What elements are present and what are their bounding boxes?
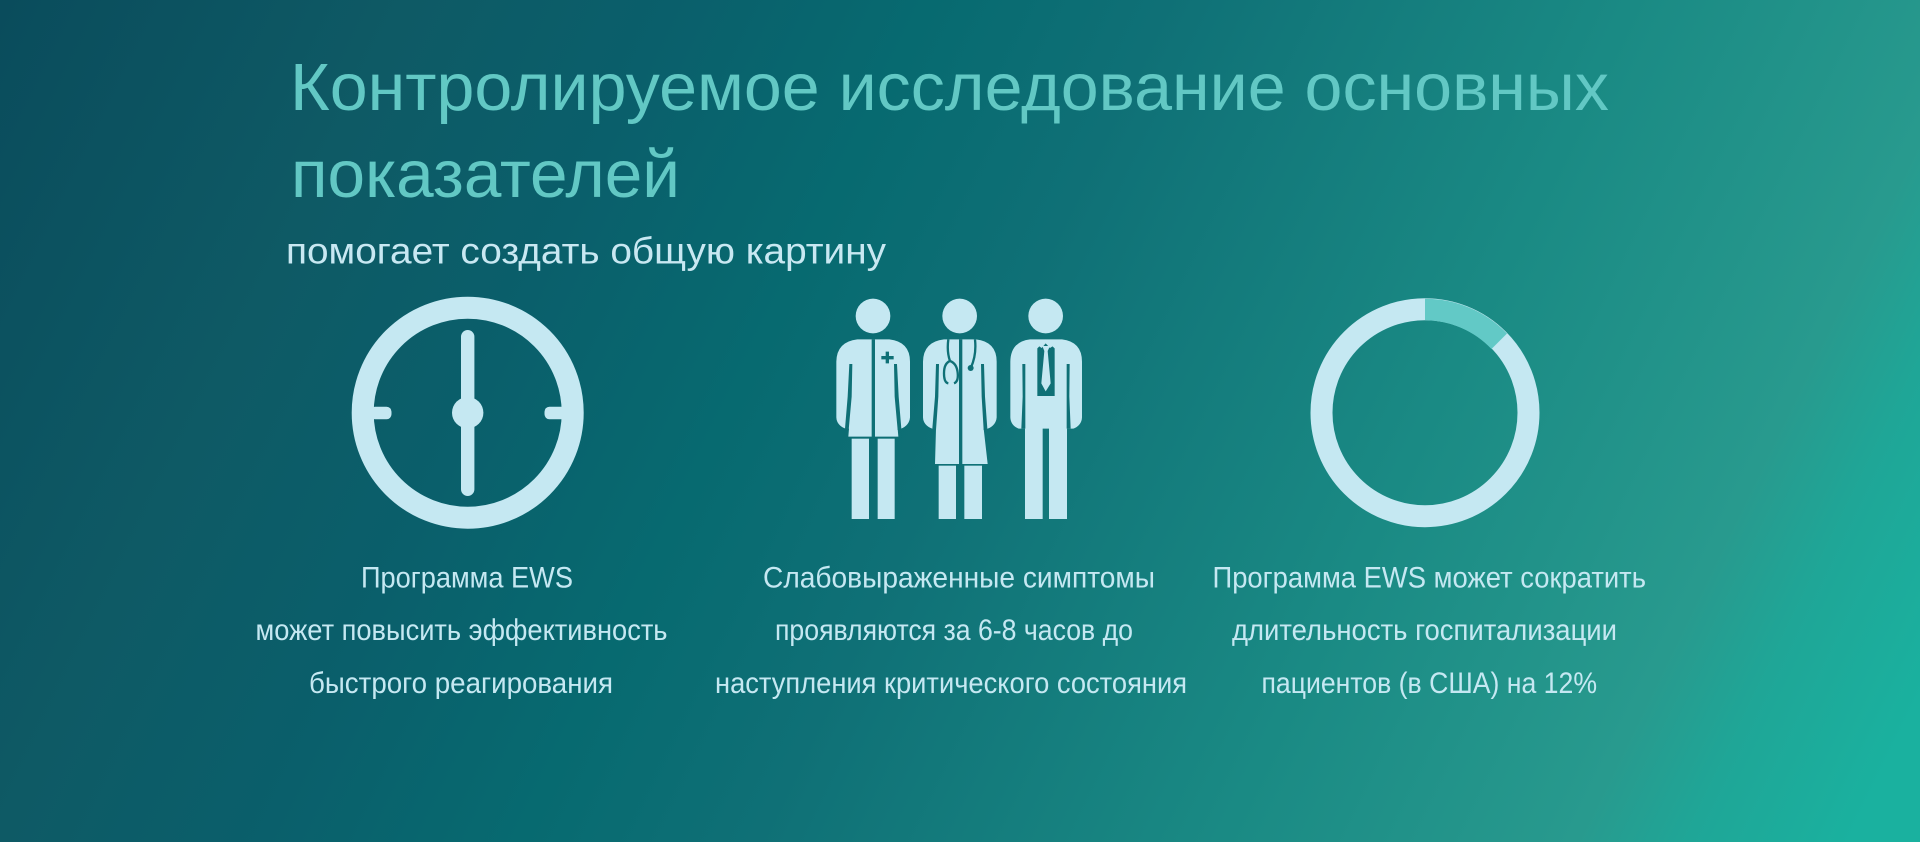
text: rapid response: Программа EWS: [361, 562, 573, 594]
text: early symptoms: наступления критического состояния: [715, 667, 1187, 700]
icon: doctor with cross: [836, 299, 910, 519]
icon: medical staff: [836, 299, 1082, 519]
text: rapid response: [256, 562, 668, 700]
text: length of stay: Программа EWS может сократить: [1212, 562, 1646, 594]
title: показателей: [291, 137, 680, 212]
text: early symptoms: [715, 562, 1187, 700]
text: length of stay: длительность госпитализации: [1232, 614, 1617, 647]
icon: doctor with stethoscope: [923, 299, 997, 519]
icon: man in suit: [1010, 299, 1082, 519]
title: Контролируемое исследование основных: [290, 50, 1609, 125]
text: length of stay: [1212, 562, 1646, 700]
text: rapid response: быстрого реагирования: [309, 667, 613, 700]
icon: clock: [363, 308, 573, 518]
text: rapid response: может повысить эффективность: [256, 614, 668, 647]
subtitle: помогает создать общую картину: [286, 230, 887, 272]
text: early symptoms: Слабовыраженные симптомы: [763, 562, 1155, 594]
donut chart: 12%: [1322, 299, 1528, 516]
text: length of stay: пациентов (в США) на 12%: [1262, 667, 1597, 700]
text: early symptoms: проявляются за 6-8 часов до: [775, 614, 1133, 647]
title: [290, 50, 1609, 212]
